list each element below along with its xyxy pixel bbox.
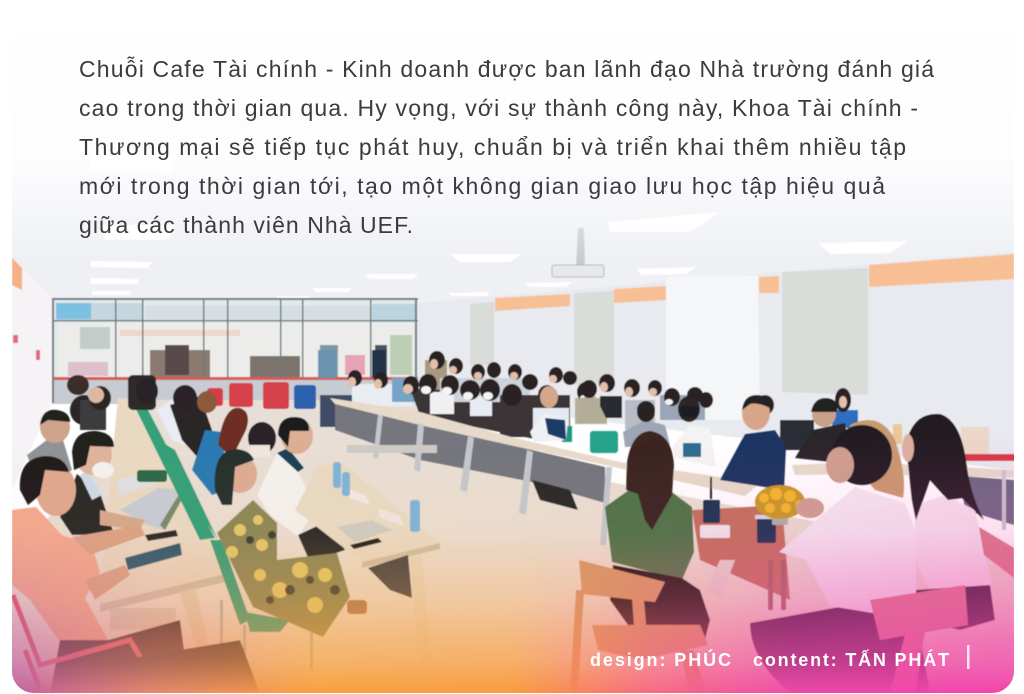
left wall orange accent [12,258,22,290]
man in pink shirt, foreground [12,456,190,693]
young man in white shirt, seen from behind [750,425,930,693]
people near row: left side [27,375,111,490]
right side pink tint [600,430,1024,694]
orange wall stripes [495,254,1014,311]
credits: design: PHÚC [590,649,731,670]
faces and masks [348,359,847,408]
credits [590,649,949,670]
wooden chair, centre [570,560,708,693]
coffee cup right [755,515,778,543]
man in navy shirt [720,395,786,490]
ceiling with lights [12,199,1014,303]
man in white polo [257,417,345,562]
projector [552,228,604,277]
middle row people [530,380,716,467]
right wall [417,310,1014,470]
man in black jacket with mask [60,431,145,535]
woman in floral dress [215,449,367,637]
wall logo marks [13,335,40,360]
colour gradient overlay [12,440,1014,694]
back chairs [207,382,316,409]
foreground dark legs [110,640,260,693]
back row audience [165,345,858,450]
items on left table [117,470,187,570]
seated audience opposite side [128,375,276,495]
body text: mới trong thời gian tới, tạo một không gian giao lưu học tập hiệu quả [79,173,885,199]
credits: content: TẤN PHÁT [753,649,949,670]
window blinds [470,268,868,395]
top white fade [12,10,1014,260]
foreground red chair [13,595,145,690]
pillars [666,275,760,420]
left table near [100,398,225,670]
vertical divider [967,645,970,669]
body text [79,56,934,238]
blonde woman behind [850,420,904,498]
foreground pink chairs [870,527,1014,693]
glass partition wall [52,298,418,404]
chair legs [220,600,314,670]
body text: cao trong thời gian qua. Hy vọng, với sự thành công này, Khoa Tài chính - [79,95,918,121]
coffee cup left [703,477,720,523]
body text: giữa các thành viên Nhà UEF. [79,212,413,238]
coffee table with drinks and flowers [692,477,805,610]
centre near table [295,462,440,610]
left wall [12,310,52,488]
classroom photo [12,199,1014,693]
body text: Thương mại sẽ tiếp tục phát huy, chuẩn bị và triển khai thêm nhiều tập [79,134,906,160]
floor [12,400,1014,693]
body text: Chuỗi Cafe Tài chính - Kinh doanh được ban lãnh đạo Nhà trường đánh giá [79,56,934,82]
green chair row [133,403,290,632]
man in black sweater [795,398,850,463]
long back table [330,398,760,545]
right side table with boxes [792,424,1015,530]
seated woman with long hair, right [902,414,995,630]
photo card: seminar room [12,199,1014,693]
yellow flowers [755,485,805,525]
woman in green blouse, seen from behind [605,431,710,642]
